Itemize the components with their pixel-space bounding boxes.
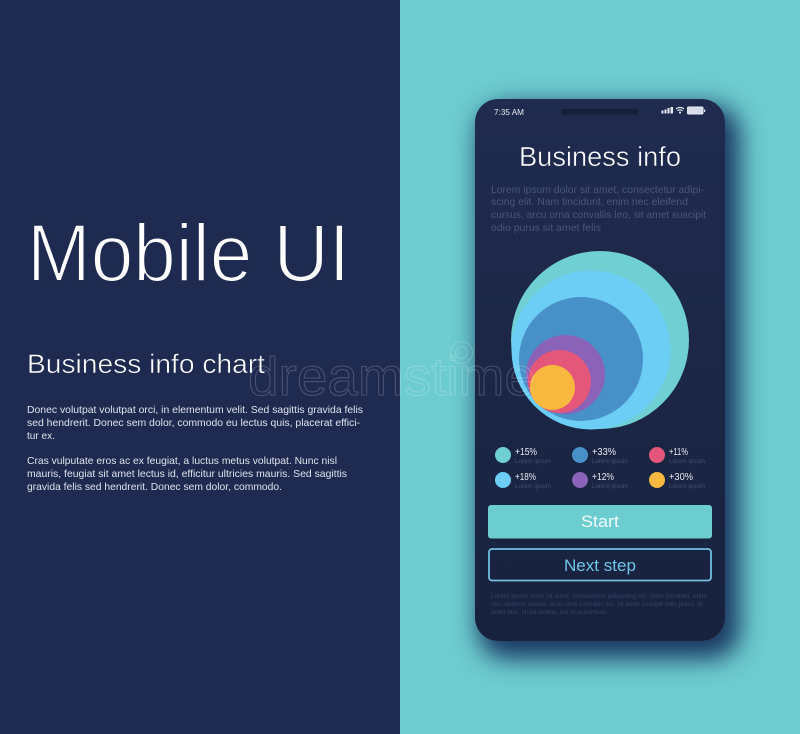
legend item: +12%: +12% [592,472,614,483]
legend item: +30%: +30% [669,472,693,483]
phone notch [561,109,638,114]
text block: phone footer: nec eleifend cursus, arcu urna convallis leo, sit amet suscipit odio purus sit [491,602,703,608]
panel: right teal background [400,0,800,734]
legend item: +18%: Lorem ipsum [515,484,551,490]
button: Next step: Next step [564,556,636,575]
legend item: +30% [649,472,705,490]
legend item: +33%: +33% [592,447,616,458]
icon: battery [688,107,705,114]
text block: left description: Cras vulputate eros ac ex feugiat, a luctus metus volutpat. Nunc nisl [27,455,337,467]
status bar time: 7:35 AM [494,108,524,117]
text block: left description: gravida felis sed hendrerit. Donec sem dolor, commodo. [27,481,282,493]
icon: wifi [676,107,684,113]
legend item: +33% [572,447,628,465]
button: Start [488,505,712,538]
text block: left description: sed hendrerit. Donec sem dolor, commodo eu lectus quis, placerat effici- [27,417,360,429]
text block: left description: tur ex. [27,430,55,442]
legend item: +11% [649,447,705,465]
button: Next step [489,549,711,580]
watermark: dreamstime [248,347,535,407]
legend item: +15% [495,447,551,465]
text block: phone footer: Lorem ipsum dolor sit amet, consectetur adipiscing elit. Nam tincidunt, enim [491,594,707,600]
text block: phone intro: scing elit. Nam tincidunt, enim nec eleifend [491,196,688,208]
text block: phone intro: cursus, arcu urna convallis leo, sit amet suscipit [491,209,706,221]
text block: left description: mauris, feugiat sit amet lectus id, efficitur ultricies mauris. Sed sagittis [27,468,347,480]
heading: Mobile UI: Mobile UI [27,208,350,299]
legend item: +33%: Lorem ipsum [592,459,628,465]
panel: left navy background [0,0,400,734]
text block: left description: Donec volutpat volutpat orci, in elementum velit. Sed sagittis gravida felis [27,404,363,416]
text block: phone intro [491,184,706,234]
text block: phone intro: odio purus sit amet felis [491,222,601,234]
text block: phone intro: Lorem ipsum dolor sit amet, consectetur adipi- [491,184,704,196]
icon: signal bars [662,107,673,114]
text block: phone footer: amet felis. Nulla lacinia, est id accumsan. [491,610,608,616]
phone heading: Business info: Business info [519,141,681,172]
phone drop shadow [475,99,725,641]
legend item: +15%: Lorem ipsum [515,459,551,465]
chart: nested circles [511,251,689,430]
legend item: +30%: Lorem ipsum [669,484,705,490]
legend item: +18%: +18% [515,472,536,483]
legend [495,447,705,490]
text block: left description [27,404,363,493]
legend item: +11%: Lorem ipsum [669,459,705,465]
legend item: +15%: +15% [515,447,537,458]
subheading: Business info chart: Business info chart [27,349,266,379]
panel: phone screen [475,99,725,641]
legend item: +12%: Lorem ipsum [592,484,628,490]
text block: phone footer [491,594,707,616]
legend item: +18% [495,472,551,490]
legend item: +11%: +11% [669,447,688,458]
button: Start: Start [581,512,619,531]
legend item: +12% [572,472,628,490]
